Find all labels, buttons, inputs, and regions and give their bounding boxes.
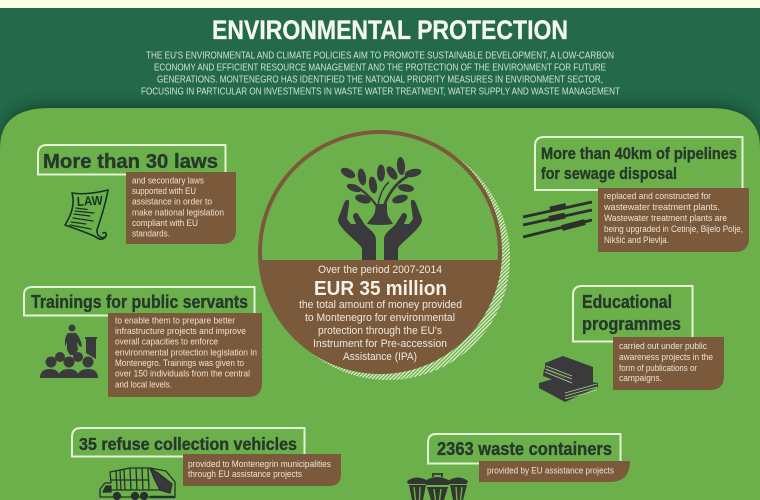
heading box (72, 428, 304, 456)
description (132, 175, 224, 240)
description: assistance in order to (132, 197, 212, 208)
description: and secondary laws (132, 175, 204, 186)
description box (598, 188, 749, 252)
central text: Assistance (IPA) (343, 351, 417, 363)
icon: law scroll: LAW (76, 193, 104, 209)
description: infrastructure projects and improve (115, 326, 246, 337)
central circle (258, 130, 510, 380)
panel: pipelines (523, 137, 749, 252)
description (115, 315, 257, 390)
heading: programmes (582, 314, 681, 334)
description box (613, 337, 724, 390)
description: over 150 individuals from the central (115, 369, 250, 380)
description: provided to Montenegrin municipalities (188, 459, 331, 470)
heading: 35 refuse collection vehicles (79, 434, 297, 454)
icon: tree in hands (338, 157, 422, 260)
heading: Educational (582, 292, 672, 312)
description: replaced and constructed for (604, 191, 712, 202)
intro text (141, 51, 620, 98)
description: Montenegro. Trainings was given to (115, 358, 244, 369)
central text: protection through the EU's (318, 325, 442, 337)
top cream strip (0, 0, 760, 8)
description: overall capacities to enforce (115, 337, 218, 348)
description box (183, 454, 341, 486)
heading box (24, 287, 254, 316)
hatched crescent shadow (266, 136, 510, 380)
description: provided by EU assistance projects (487, 466, 614, 476)
description: compliant with EU (132, 218, 198, 229)
title: ENVIRONMENTAL PROTECTION (212, 15, 568, 45)
description: standards. (132, 229, 170, 240)
icon: law scroll (65, 190, 108, 239)
central text: to Montenegro for environmental (305, 312, 455, 324)
icon: books (539, 356, 598, 402)
description box (108, 313, 262, 397)
heading: Trainings for public servants (31, 292, 248, 312)
panel shadow (0, 104, 760, 220)
central text: EUR 35 million (314, 278, 447, 300)
description: through EU assistance projects (188, 469, 302, 480)
intro text: GENERATIONS. MONTENEGRO HAS IDENTIFIED THE NATIONAL PRIORITY MEASURES IN ENVIRONMENT SECTOR, (157, 75, 603, 86)
description (603, 191, 743, 246)
description: awareness projects in the (619, 352, 713, 363)
heading box (38, 145, 226, 174)
description box (126, 172, 236, 244)
icon: garbage truck (100, 468, 175, 500)
description: form of publications or (619, 363, 698, 374)
description: and local levels. (115, 379, 172, 390)
description: environmental protection legislation in (115, 347, 257, 358)
intro text: THE EU'S ENVIRONMENTAL AND CLIMATE POLICIES AIM TO PROMOTE SUSTAINABLE DEVELOPMENT, A LOW-CARBON (146, 51, 614, 62)
brown lower half (258, 260, 502, 374)
intro text: FOCUSING IN PARTICULAR ON INVESTMENTS IN WASTE WATER TREATMENT, WATER SUPPLY AND WASTE MANAGEMENT (141, 87, 620, 98)
description: make national legislation (132, 207, 224, 218)
central text (299, 264, 462, 363)
central text: the total amount of money provided (299, 299, 462, 311)
panel: refuse vehicles (72, 428, 341, 500)
description: supported with EU (132, 186, 196, 197)
icon: waste bins (407, 474, 468, 500)
description (188, 459, 331, 480)
heading (541, 144, 737, 183)
heading box (535, 137, 742, 190)
description: Nikšić and Plevlja. (604, 235, 669, 246)
heading: More than 30 laws (43, 151, 218, 173)
description: to enable them to prepare better (115, 315, 236, 326)
description: campaigns. (619, 373, 662, 384)
panel: waste containers (407, 434, 630, 500)
icon: trainer and audience (40, 324, 98, 378)
heading: for sewage disposal (541, 164, 677, 183)
panel: laws (38, 145, 236, 244)
panel: trainings (24, 287, 262, 397)
heading: 2363 waste containers (437, 439, 612, 459)
panel: educational programmes (539, 286, 724, 402)
heading box (428, 434, 620, 464)
description: carried out under public (619, 341, 707, 352)
description: wastewater treatment plants. (603, 202, 720, 213)
central text: Over the period 2007-2014 (318, 264, 442, 276)
description (619, 341, 713, 384)
icon: pipes (523, 202, 592, 237)
central text: Instrument for Pre-accession (313, 338, 447, 350)
intro text: ECONOMY AND EFFICIENT RESOURCE MANAGEMENT AND THE PROTECTION OF THE ENVIRONMENT FOR FUTURE (154, 63, 606, 74)
heading (582, 292, 681, 334)
heading box (573, 286, 692, 342)
description: Wastewater treatment plants are (604, 213, 727, 224)
circle background and ring (260, 132, 500, 372)
main green panel (0, 108, 760, 500)
description box (479, 461, 630, 482)
